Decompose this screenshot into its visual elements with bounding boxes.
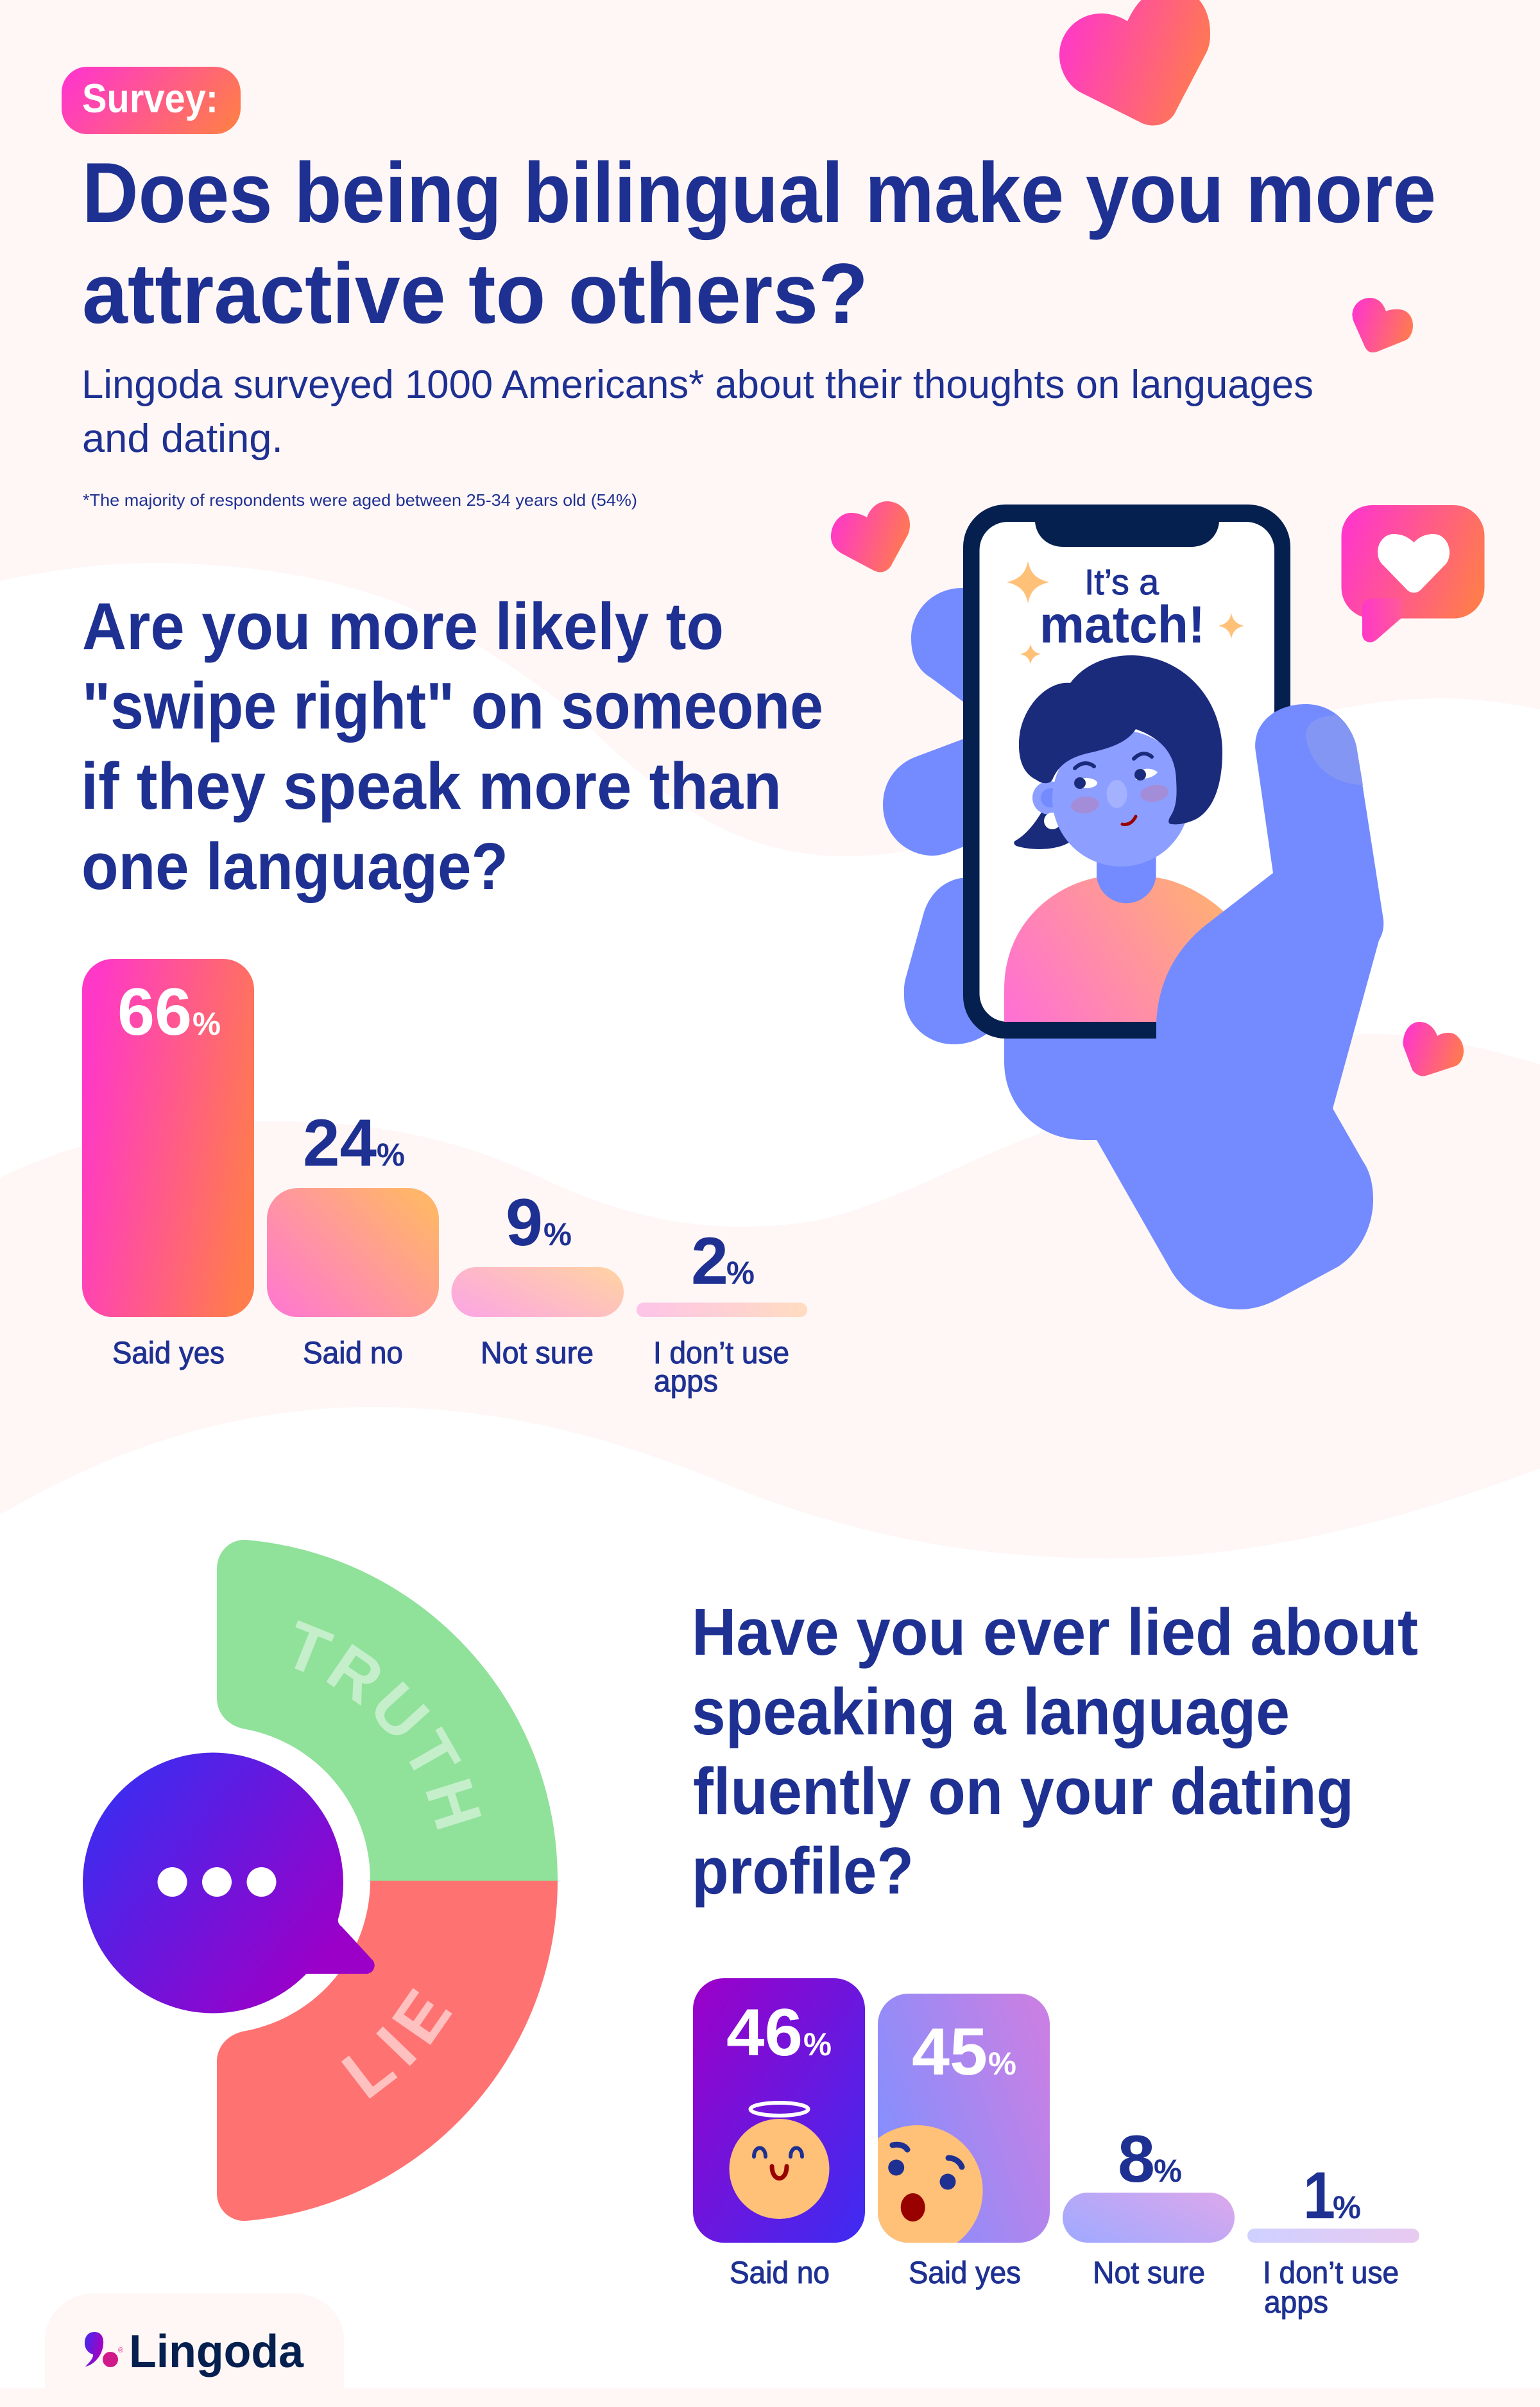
bar: said no 24% (267, 1106, 439, 1317)
icon: heart chat bubble (1341, 505, 1485, 643)
bar: said no 46%: 46 (726, 1996, 803, 2070)
bar: said no 46% (693, 1978, 865, 2243)
logo wordmark: Lingoda (129, 2326, 304, 2377)
logo mark: ® (118, 2347, 123, 2354)
intro text (81, 363, 1313, 461)
heading: lied question: Have you ever lied about (692, 1595, 1418, 1669)
bar: said yes 45%: 45 (912, 2015, 988, 2089)
bar labels (730, 2256, 1399, 2320)
bar: not sure 9%: % (543, 1216, 572, 1252)
heading: swipe right question: one language? (81, 829, 508, 903)
fingers behind phone (883, 588, 991, 1044)
bar labels: Said yes (112, 1336, 225, 1370)
segment: lie (217, 1881, 558, 2221)
heading: lied question: speaking a language (692, 1675, 1290, 1748)
heading: swipe right question: Are you more likely to (82, 589, 724, 663)
bar: not sure 8% (1063, 2122, 1235, 2243)
match text (1040, 562, 1205, 654)
heading: swipe right question: if they speak more than (81, 749, 782, 823)
illustration: hand holding phone (883, 505, 1383, 1309)
bar: I don't use apps 2%: % (726, 1255, 755, 1291)
bar: said no 24%: % (377, 1137, 405, 1173)
heading: lied question: profile? (692, 1834, 914, 1908)
match text: match! (1040, 596, 1205, 654)
icon: small heart right of title (1352, 298, 1413, 352)
footnote: *The majority of respondents were aged between 25-34 years old (54%) (83, 490, 637, 510)
icon: surprised face (878, 2125, 983, 2243)
bar: said yes 45% (878, 1994, 1050, 2243)
bar: said no 46%: % (803, 2026, 832, 2062)
bar labels (112, 1336, 789, 1399)
bar labels: Said no (303, 1336, 403, 1370)
bar: I don't use apps 1% (1247, 2159, 1419, 2243)
heading: lied question (692, 1595, 1418, 1908)
match text: It’s a (1084, 562, 1159, 602)
hand and thumb (1004, 704, 1383, 1309)
bar chart: swipe right (82, 959, 807, 1399)
bar labels: Said yes (909, 2256, 1021, 2290)
segment: lie: LIE (341, 1988, 452, 2099)
segment: truth: TRUTH (295, 1620, 481, 1829)
intro text: and dating. (82, 417, 283, 461)
bar: not sure 8%: % (1154, 2153, 1182, 2189)
icon: heart lower right (1403, 1022, 1464, 1076)
icon: large heart (1059, 0, 1210, 126)
segment: truth (217, 1540, 558, 1881)
bar: said yes 66%: 66 (117, 975, 192, 1049)
bar: said yes 45%: % (988, 2046, 1016, 2082)
person (1004, 655, 1224, 1027)
bar: I don't use apps 1%: 1 (1303, 2159, 1335, 2233)
bar: said yes 66% (82, 959, 254, 1317)
bar: said yes 66%: % (193, 1006, 221, 1042)
title: Does being bilingual make you more (82, 146, 1436, 241)
icon: speech bubble (83, 1752, 375, 2013)
heading: lied question: fluently on your dating (693, 1754, 1354, 1828)
sparkles (1007, 561, 1244, 664)
heading: swipe right question: "swipe right" on someone (82, 669, 823, 743)
title (82, 146, 1436, 341)
bar labels: apps (654, 1365, 718, 1399)
intro text: Lingoda surveyed 1000 Americans* about their thoughts on languages (81, 363, 1313, 407)
bar: not sure 8%: 8 (1118, 2122, 1155, 2196)
bar labels: Said no (730, 2256, 830, 2290)
bar: I don't use apps 2% (637, 1224, 807, 1317)
bar: I don't use apps 1%: % (1333, 2189, 1361, 2225)
bar chart: lied (693, 1978, 1419, 2320)
bar: not sure 9% (452, 1186, 624, 1317)
phone body (963, 505, 1290, 1039)
logo tab (45, 2293, 344, 2388)
title: attractive to others? (82, 246, 868, 341)
bar labels: Not sure (481, 1336, 594, 1370)
bar: not sure 9%: 9 (506, 1186, 543, 1260)
logo mark (85, 2332, 123, 2367)
icon: angel face (729, 2103, 829, 2219)
icon: heart left of phone (831, 501, 910, 572)
badge: Survey (62, 67, 241, 134)
chart: truth and lie dial (83, 1540, 558, 2221)
bar labels: apps (1264, 2286, 1328, 2320)
bar: I don't use apps 2%: 2 (691, 1224, 728, 1298)
heading: swipe right question (81, 589, 823, 903)
thumbnail (1306, 715, 1363, 785)
bar labels: I don’t use (1263, 2256, 1399, 2290)
bar labels: I don’t use (653, 1336, 789, 1370)
bar: said no 24%: 24 (303, 1106, 377, 1180)
bar labels: Not sure (1093, 2256, 1205, 2290)
badge: Survey: Survey: (82, 76, 218, 121)
bottom band (0, 2388, 1540, 2407)
